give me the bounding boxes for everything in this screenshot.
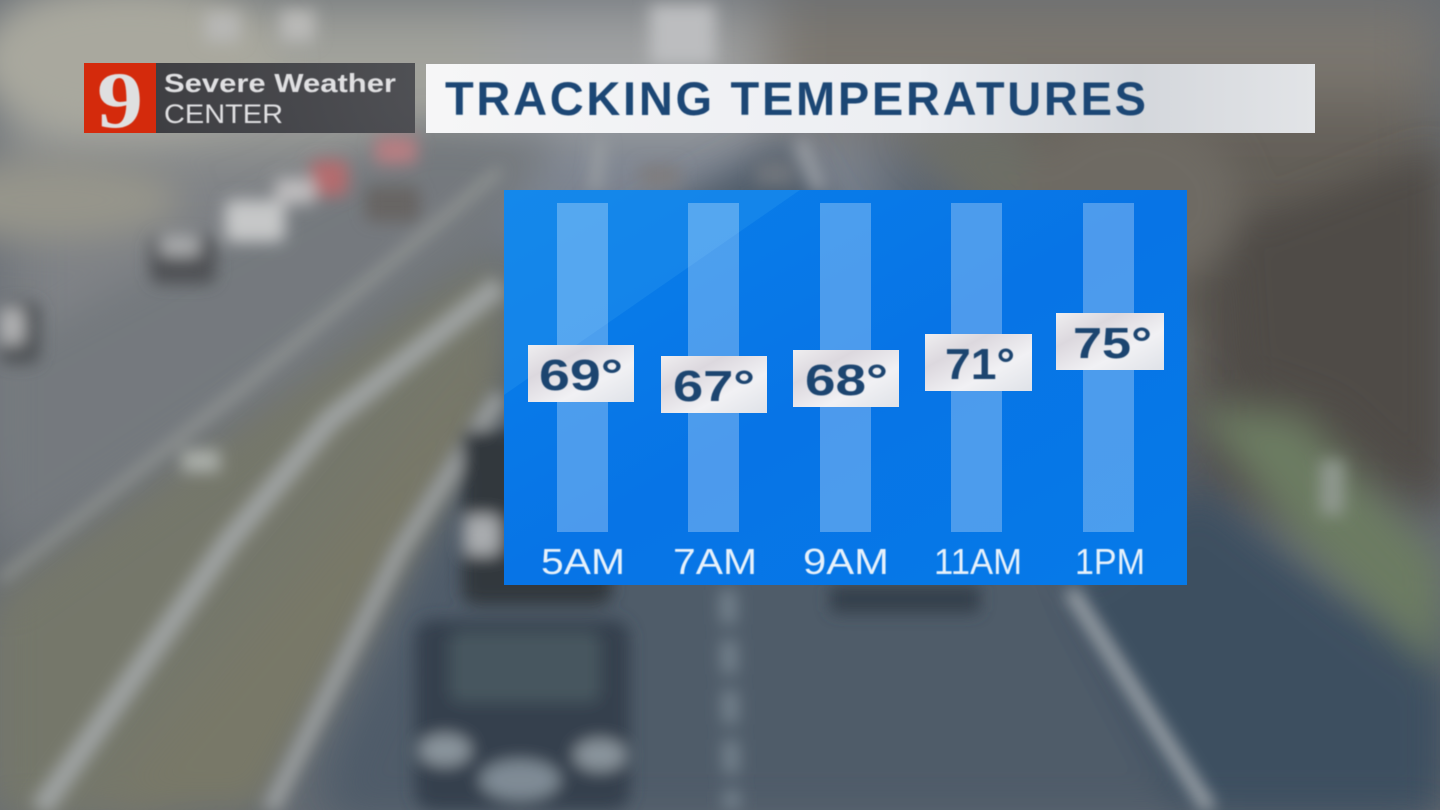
column: 5AM (528, 203, 634, 582)
logo bar background (84, 63, 415, 133)
panel: temperature chart (504, 190, 1187, 585)
time label: 7AM: 7AM (673, 541, 757, 582)
title bar (426, 64, 1315, 133)
panel sheen (504, 190, 800, 395)
time label: 5AM: 5AM (541, 541, 625, 582)
value chip: 71: 71° (945, 340, 1015, 389)
column: 1PM (1056, 203, 1164, 582)
blurred cars (225, 200, 285, 242)
value chip: 67 (661, 356, 767, 413)
title text: TRACKING TEMPERATURES (445, 72, 1146, 125)
value chip: 67: 67° (673, 362, 755, 411)
icon: channel 9 logo (84, 57, 156, 145)
time label: 11AM: 11AM (934, 541, 1022, 582)
value chip: 68 (793, 350, 899, 407)
column: 11AM (925, 203, 1032, 582)
value chip: 75 (1056, 313, 1164, 370)
column: 9AM (793, 203, 899, 582)
time label: 1PM: 1PM (1075, 541, 1145, 582)
icon: channel 9 logo: 9 (97, 57, 143, 145)
value chip: 69 (528, 345, 634, 402)
time label: 9AM: 9AM (803, 541, 889, 582)
value chip: 71 (925, 334, 1032, 391)
logo text: CENTER (164, 99, 283, 129)
left lane edges and guardrails (0, 170, 500, 580)
value chip: 69: 69° (539, 351, 623, 400)
header: Severe Weather Center logo bar (84, 57, 415, 145)
value chip: 68: 68° (805, 356, 888, 405)
logo text: Severe Weather (164, 68, 396, 98)
value chip: 75: 75° (1073, 319, 1152, 368)
column: 7AM (661, 203, 767, 582)
logo text (164, 68, 396, 129)
